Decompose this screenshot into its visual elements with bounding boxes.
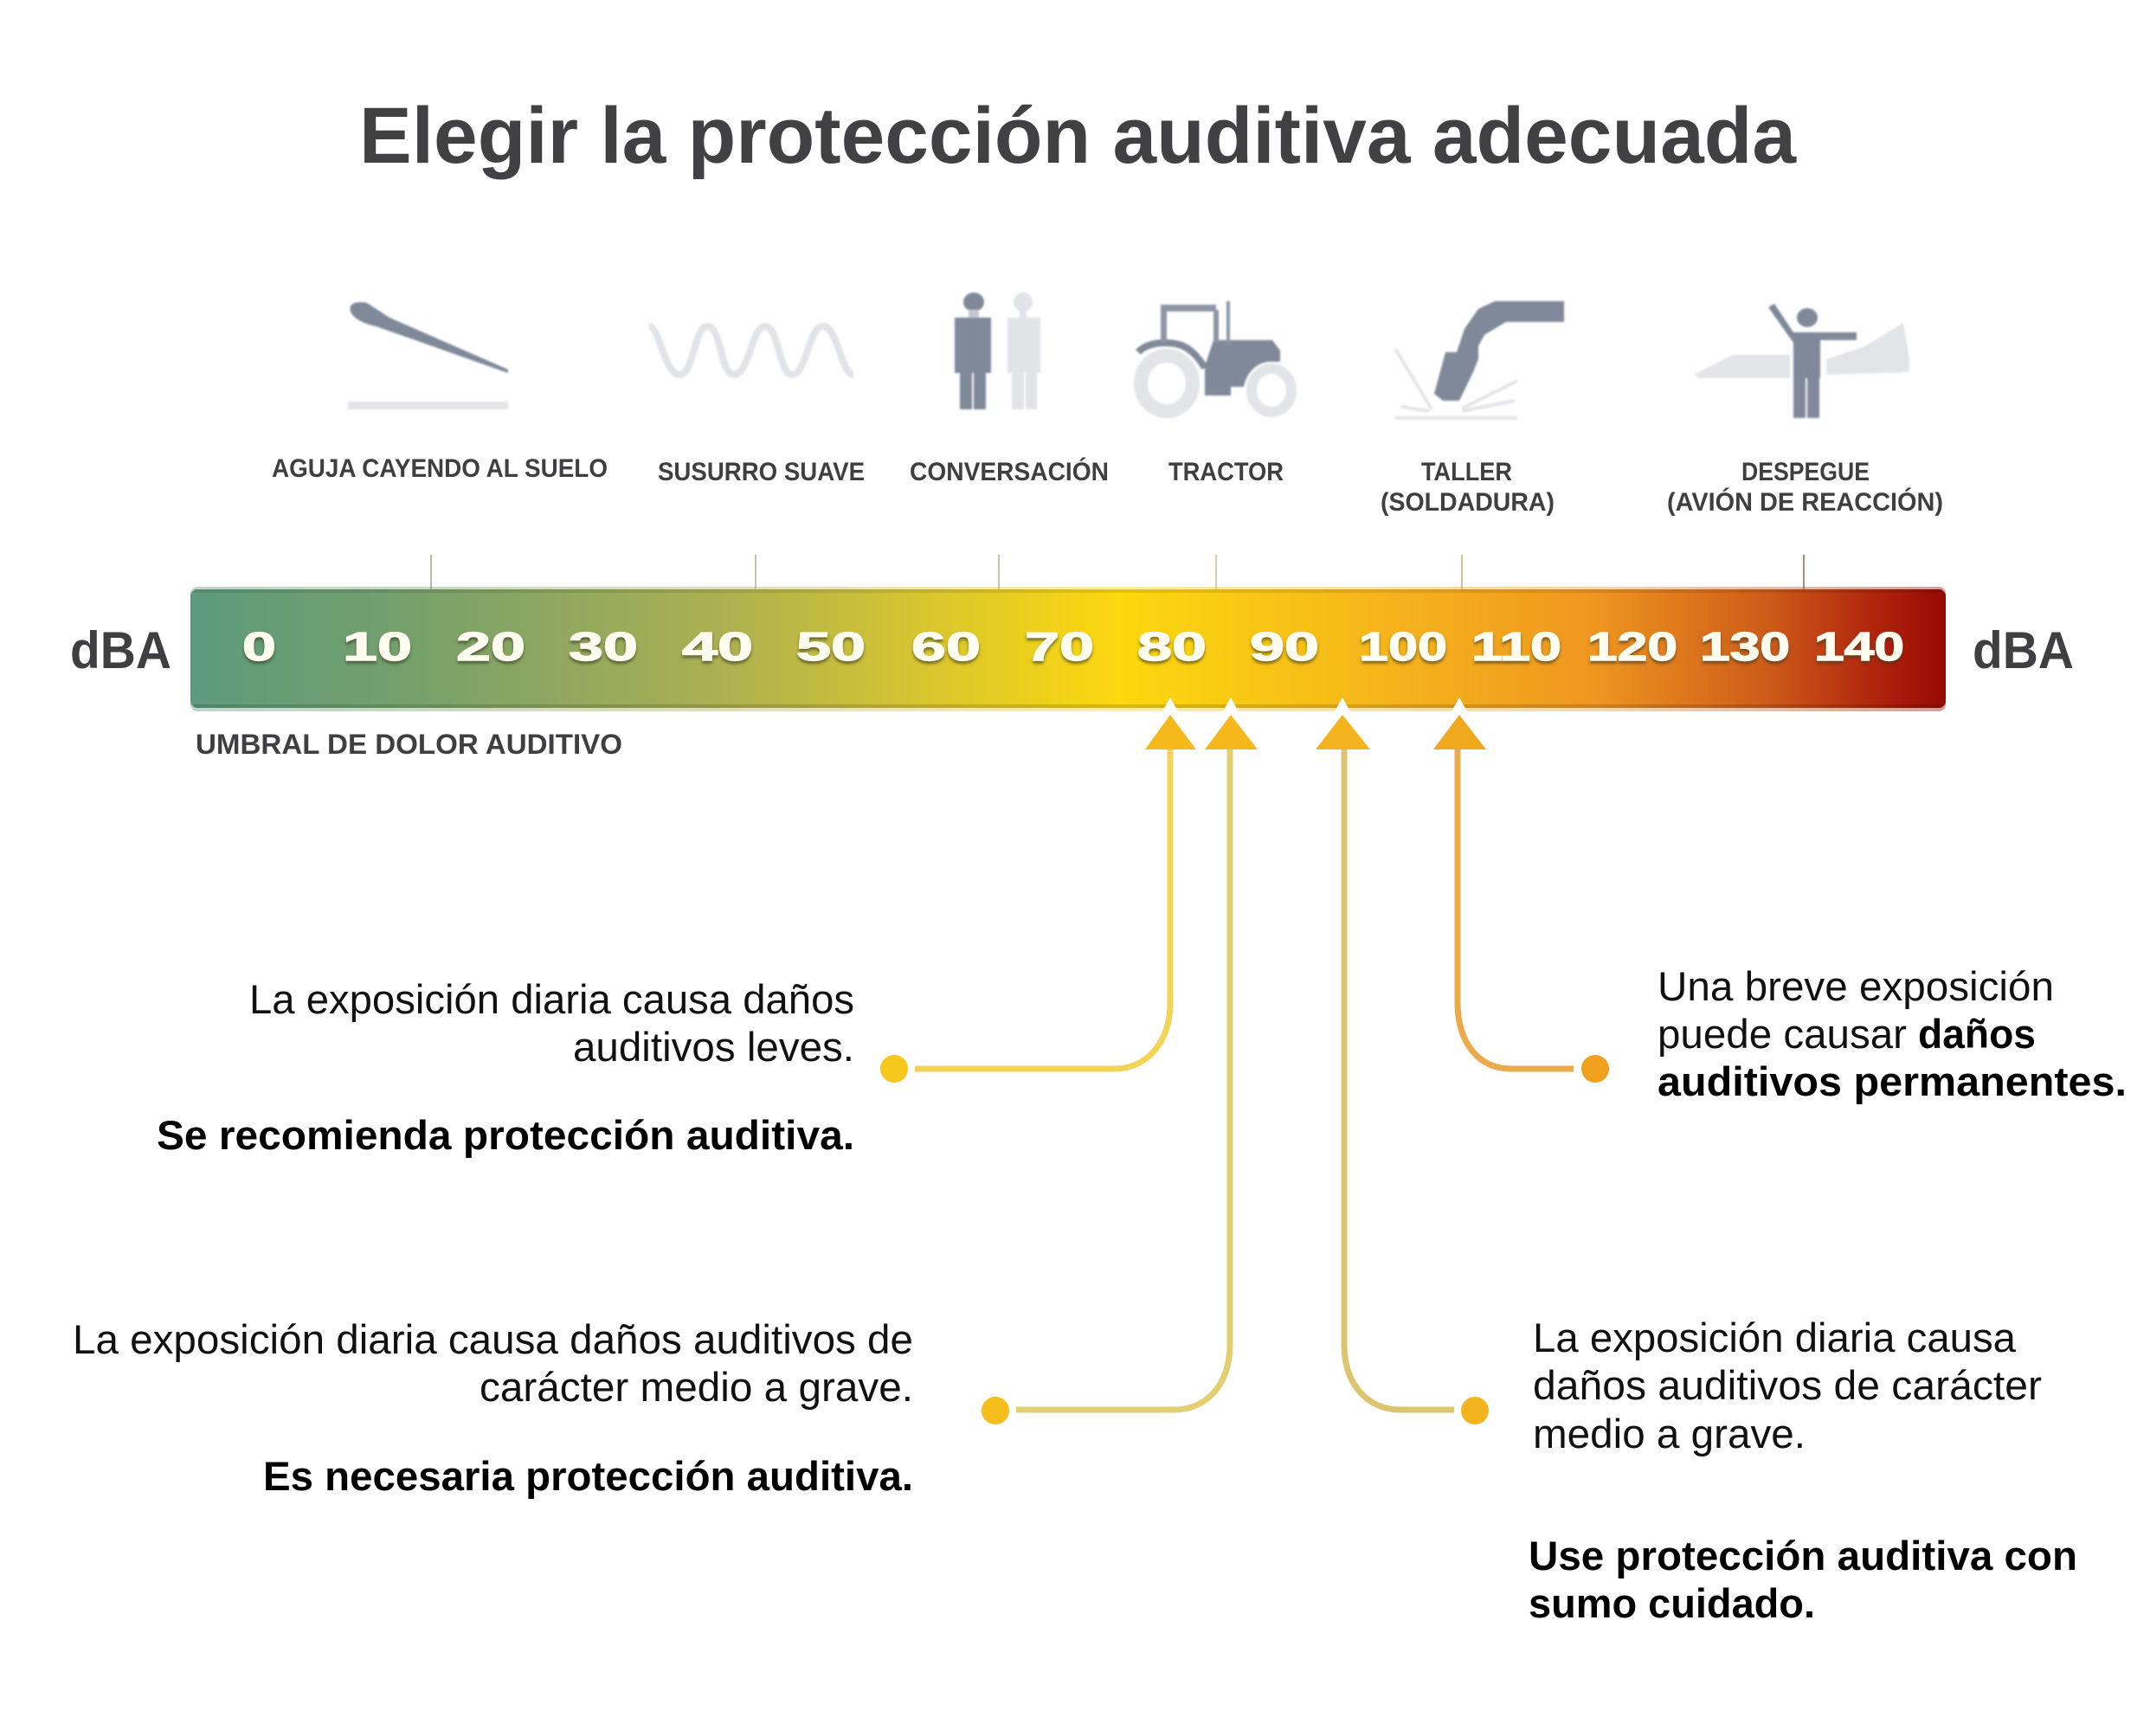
scale numbers: 30 xyxy=(569,624,638,669)
icon: welding torch with sparks xyxy=(1395,301,1564,418)
text block: mild damage xyxy=(157,976,854,1158)
text block: medium to severe damage, left: carácter medio a grave. xyxy=(480,1364,913,1410)
scale numbers: 120 xyxy=(1587,624,1677,669)
tick marks from sources to scale xyxy=(431,555,1804,590)
scale numbers: 80 xyxy=(1137,624,1207,669)
icon: two people talking xyxy=(955,293,1040,409)
scale numbers: 100 xyxy=(1359,624,1447,669)
icon: person signalling jet takeoff xyxy=(1694,304,1909,418)
title: Elegir la protección auditiva adecuada xyxy=(359,92,1797,180)
text block: medium to severe damage, left: Es necesaria protección auditiva. xyxy=(263,1453,913,1499)
text block: mild damage: auditivos leves. xyxy=(573,1024,854,1070)
label: tractor: TRACTOR xyxy=(1168,458,1284,486)
text block: medium to severe damage, right: daños auditivos de carácter xyxy=(1533,1362,2042,1408)
label: takeoff: (AVIÓN DE REACCIÓN) xyxy=(1667,487,1943,517)
scale numbers: 70 xyxy=(1025,624,1094,669)
label: takeoff: DESPEGUE xyxy=(1741,458,1870,486)
dBA scale bar xyxy=(190,587,1946,713)
scale numbers: 130 xyxy=(1700,624,1790,669)
label: needle: AGUJA CAYENDO AL SUELO xyxy=(272,454,608,483)
text block: medium to severe damage, right: La exposición diaria causa xyxy=(1533,1315,2017,1360)
label: workshop: (SOLDADURA) xyxy=(1381,488,1555,517)
label: pain threshold: UMBRAL DE DOLOR AUDITIVO xyxy=(196,729,622,760)
scale numbers: 40 xyxy=(682,624,753,669)
scale numbers: 20 xyxy=(456,624,525,669)
scale numbers: 10 xyxy=(343,624,412,669)
text block: medium to severe damage, left xyxy=(73,1316,913,1499)
text block: medium to severe damage, right: Use protección auditiva con xyxy=(1529,1533,2077,1578)
text block: permanent damage xyxy=(1658,963,2127,1104)
text block: mild damage: La exposición diaria causa daños xyxy=(249,976,854,1022)
scale numbers: 140 xyxy=(1814,624,1904,669)
text block: permanent damage: auditivos permanentes. xyxy=(1658,1058,2127,1104)
scale numbers: 90 xyxy=(1250,624,1319,669)
icon row: sound sources xyxy=(348,293,1909,418)
scale numbers: 50 xyxy=(796,624,866,669)
label: workshop: TALLER xyxy=(1421,458,1512,486)
scale numbers: 60 xyxy=(911,624,981,669)
text block: medium to severe damage, right: sumo cuidado. xyxy=(1529,1580,1815,1626)
label: dBA left: dBA xyxy=(70,621,171,679)
icon: tractor xyxy=(1138,301,1291,412)
text block: permanent damage: Una breve exposición xyxy=(1658,963,2054,1009)
icon: needle falling to the floor xyxy=(348,302,508,409)
arrow: 105 dBA pointer xyxy=(1433,715,1609,1083)
scale numbers: 0 xyxy=(242,624,276,669)
white notches on the bar xyxy=(1162,698,1468,713)
text block: medium to severe damage, left: La exposición diaria causa daños auditivos de xyxy=(73,1316,913,1362)
label: conversation: CONVERSACIÓN xyxy=(910,457,1109,486)
arrow: 80 dBA pointer xyxy=(880,715,1196,1083)
scale numbers xyxy=(242,624,1904,669)
text block: mild damage: Se recomienda protección auditiva. xyxy=(157,1112,854,1158)
arrow: 95 dBA pointer xyxy=(1316,715,1489,1424)
text block: permanent damage: puede causar xyxy=(1658,1011,1907,1057)
text block: medium to severe damage, right xyxy=(1529,1315,2077,1626)
text block: medium to severe damage, right: medio a grave. xyxy=(1533,1411,1806,1456)
arrow: 85 dBA pointer xyxy=(982,715,1258,1424)
text block: permanent damage: daños xyxy=(1918,1011,2036,1057)
label: workshop xyxy=(1381,458,1555,517)
label: dBA right: dBA xyxy=(1973,621,2074,679)
label: takeoff xyxy=(1667,458,1943,517)
scale numbers: 110 xyxy=(1471,624,1561,669)
icon: soft whisper wave xyxy=(649,326,853,375)
label: whisper: SUSURRO SUAVE xyxy=(658,458,865,486)
